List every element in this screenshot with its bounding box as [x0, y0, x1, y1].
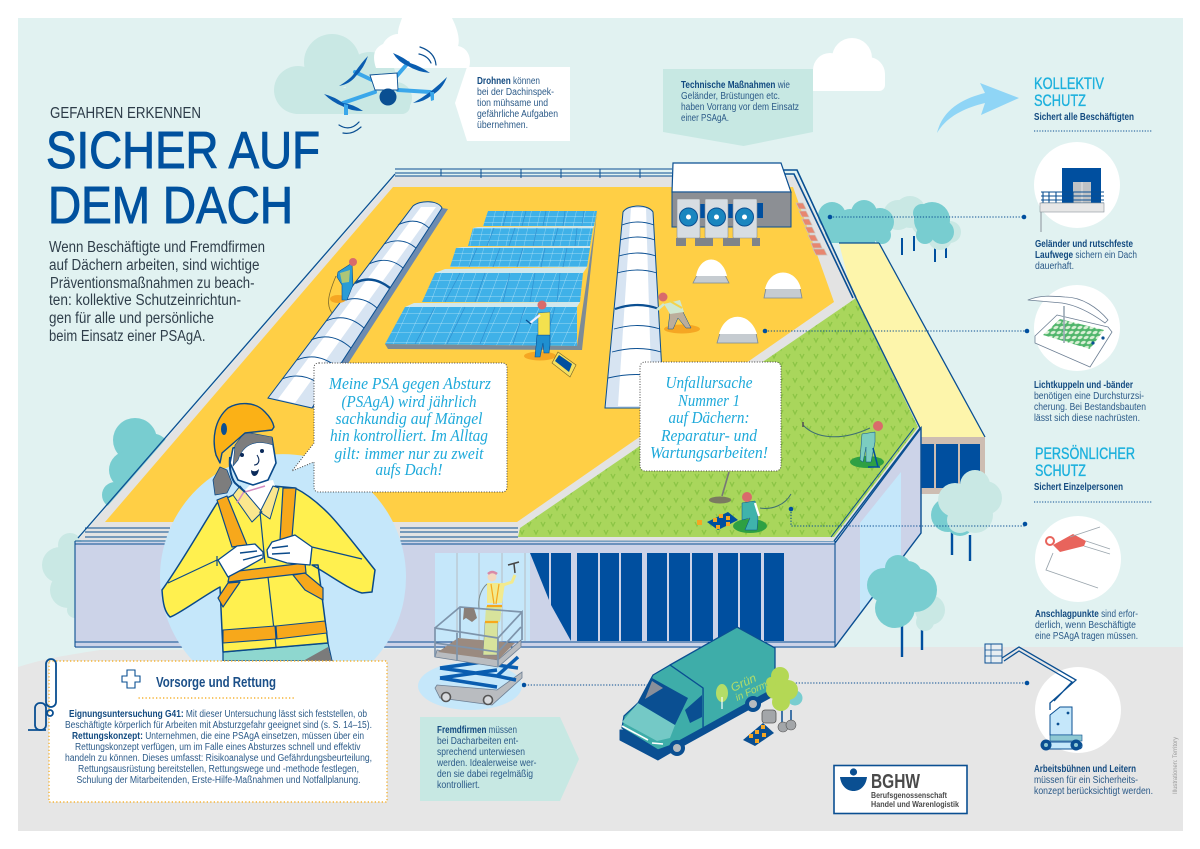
- title block: [46, 105, 320, 235]
- callout: Unfallursache: auf Dächern:: [668, 408, 750, 427]
- dotted connector lines: [522, 215, 1029, 687]
- box body text: Rettungsausrüstung bereitstellen, Rettungswege und -methode festlegen,: [78, 764, 359, 775]
- solar panel array: [385, 211, 597, 350]
- heading: Kollektivschutz: Sichert alle Beschäftigten: [1034, 112, 1134, 123]
- face: [230, 438, 276, 485]
- van: [620, 627, 775, 760]
- intro paragraph: [49, 239, 265, 345]
- caption: railing: dauerhaft.: [1035, 261, 1074, 272]
- lower side building: pale yellow roof: [839, 243, 985, 437]
- walkway pavers: [796, 203, 827, 255]
- light blue circle: [160, 454, 406, 661]
- heading: Persoenlicher Schutz: SCHUTZ: [1035, 461, 1086, 480]
- icon circle: railing: [1034, 142, 1120, 232]
- box body text: Beschäftigte körperlich für Arbeiten mit Absturzgefahr geeignet sind (s. S. 14–15).: [65, 720, 372, 731]
- caption: work platforms: konzept berücksichtigt werden.: [1034, 786, 1153, 797]
- heading: Persoenlicher Schutz: Sichert Einzelpersonen: [1034, 482, 1123, 493]
- box body text: Eignungsuntersuchung G41: Mit dieser Untersuchung lässt sich feststellen, ob: [69, 709, 367, 720]
- box body text: [65, 709, 372, 786]
- intro paragraph: auf Dächern arbeiten, sind wichtige: [49, 257, 260, 274]
- ponytail: [213, 467, 232, 495]
- box: Fremdfirmen: kontrolliert.: [437, 780, 480, 791]
- box: Fremdfirmen: Fremdfirmen müssen: [437, 725, 517, 736]
- harness lanyard: [237, 486, 265, 503]
- helmet: [214, 404, 274, 463]
- cab: [622, 665, 703, 750]
- heading: Persoenlicher Schutz: PERSÖNLICHER: [1035, 444, 1135, 463]
- roof: [78, 169, 920, 541]
- hands: [218, 535, 312, 577]
- van lettering: [728, 668, 769, 704]
- scissor lift with window cleaner: [418, 562, 522, 710]
- worker at solar panels: [524, 300, 556, 360]
- box: Fremdfirmen: den sie dabei regelmäßig: [437, 769, 533, 780]
- box: Fremdfirmen: [420, 717, 579, 801]
- caption: skylight: lässt sich diese nachrüsten.: [1034, 413, 1140, 424]
- logo BGHW: Berufsgenossenschaft: [871, 790, 947, 800]
- box: Vorsorge und Rettung: [49, 661, 387, 802]
- caption: work platforms: müssen für ein Sicherheits-: [1034, 775, 1138, 786]
- box body text: handeln zu können. Dieses umfasst: Risikoanalyse und Gefährdungsbeurteilung,: [65, 753, 372, 764]
- box: Fremdfirmen: sprechend unterwiesen: [437, 747, 525, 758]
- callout: PSA: (PSAgA) wird jährlich: [342, 392, 476, 411]
- yellow roof surface: [105, 187, 834, 522]
- roof slab: [78, 176, 920, 541]
- tree and plants near the van: [743, 667, 802, 746]
- headlight: [622, 726, 663, 744]
- reflective bands: [223, 621, 327, 643]
- jacket: [162, 486, 375, 652]
- box: Fremdfirmen: werden. Idealerweise wer-: [436, 758, 536, 769]
- platform cage: [435, 607, 522, 667]
- box heading: Vorsorge und Rettung: [156, 674, 276, 691]
- callout: PSA: aufs Dach!: [376, 460, 442, 479]
- icon: safety rope and carabiner: [28, 659, 56, 730]
- glass front: [435, 553, 530, 641]
- intro paragraph: Wenn Beschäftigte und Fremdfirmen: [49, 239, 265, 256]
- caption: skylight: [1034, 380, 1146, 424]
- box body text: Schulung der Mitarbeitenden, Erste-Hilfe-Maßnahmen und Notfallplanung.: [76, 775, 360, 786]
- callout: Unfallursache: Reparatur- und: [660, 426, 758, 445]
- callout: Unfallursache: Wartungsarbeiten!: [650, 443, 768, 462]
- green roof surface: [518, 298, 918, 537]
- title block: DEM DACH: [48, 177, 293, 235]
- icon circle: skylight: [1028, 285, 1120, 371]
- caption: skylight: benötigen eine Durchsturzsi-: [1034, 391, 1144, 402]
- hood: [622, 703, 675, 741]
- heading: Kollektivschutz: KOLLEKTIV: [1034, 74, 1104, 93]
- worker at right skylight: [657, 292, 700, 334]
- worker with plants on green roof: [697, 472, 791, 533]
- left long skylight: [268, 202, 448, 410]
- tree front lower: [867, 555, 945, 657]
- neck: [238, 480, 276, 512]
- building front facade: [75, 541, 835, 648]
- roof railings: [78, 169, 920, 541]
- box: Drohnen: Drohnen können: [477, 76, 540, 87]
- building side face: [835, 428, 921, 647]
- heading: Kollektivschutz: [1034, 74, 1152, 131]
- cloud: white right: [808, 38, 885, 91]
- callout: Unfallursache: [640, 362, 781, 471]
- lower navy body: [620, 686, 775, 760]
- box: Technische Massnahmen: [663, 69, 813, 146]
- callout: Unfallursache: Nummer 1: [677, 391, 740, 410]
- tree left mint: [42, 533, 86, 618]
- worker on green roof: [803, 421, 884, 468]
- box: Technische Massnahmen: Geländer, Brüstungen etc.: [681, 91, 780, 102]
- cloud: mint behind drone: [274, 34, 412, 114]
- skylight dome 3: [717, 317, 758, 343]
- caption: anchor point: eine PSAgA tragen müssen.: [1035, 631, 1138, 642]
- tree left teal: [102, 418, 172, 511]
- worker on yellow roof left: [329, 258, 357, 313]
- arrow: [937, 83, 1019, 133]
- box: Drohnen: gefährliche Aufgaben: [477, 109, 558, 120]
- logo BGHW: BGHW: [871, 771, 920, 793]
- caption: skylight: Lichtkuppeln und -bänder: [1034, 380, 1133, 391]
- caption: railing: Geländer und rutschfeste: [1035, 239, 1133, 250]
- icon circle: aerial work platform: [985, 644, 1121, 753]
- caption: railing: [1035, 239, 1137, 272]
- box body text: Rettungskonzept verfügen, um im Falle eines Absturzes schnell und effektiv: [75, 742, 360, 753]
- callout: PSA: [292, 363, 507, 492]
- box body text: Rettungskonzept: Unternehmen, die eine PSAgA einsetzen, müssen über ein: [72, 731, 364, 742]
- right long skylight: [605, 206, 664, 408]
- van lettering: in Form: [734, 679, 769, 704]
- box: Drohnen: tion mühsame und: [477, 98, 548, 109]
- logo BGHW: Handel und Warenlogistik: [871, 799, 959, 809]
- intro paragraph: gen für alle und persönliche: [49, 310, 214, 327]
- callout: PSA: gilt: immer nur zu zweit: [334, 444, 484, 463]
- icon: medical plus: [122, 670, 140, 688]
- box: Drohnen: bei der Dachinspek-: [477, 87, 554, 98]
- lower side building: windows: [921, 437, 985, 494]
- collar: [233, 486, 279, 522]
- title block: SICHER AUF: [46, 122, 320, 180]
- caption: railing: Laufwege sichern ein Dach: [1035, 250, 1137, 261]
- van logo tree: [716, 684, 728, 702]
- harness straps: [217, 488, 323, 607]
- van lettering: Grün: [728, 671, 759, 695]
- cargo box: [670, 627, 775, 728]
- skylight dome 1: [693, 260, 729, 283]
- callout: PSA: sachkundig auf Mängel: [336, 409, 483, 428]
- trees in front right: [931, 470, 1002, 561]
- box: Technische Massnahmen: haben Vorrang vor dem Einsatz: [681, 102, 799, 113]
- windscreen: [638, 678, 688, 725]
- toolbox: [552, 352, 576, 377]
- intro paragraph: beim Einsatz einer PSAgA.: [49, 328, 206, 345]
- cloud: white top: [374, 18, 470, 68]
- trees behind the building, top right: [818, 196, 961, 262]
- icon circle: anchor point: [1035, 516, 1121, 602]
- side window: [685, 695, 702, 723]
- title block: GEFAHREN ERKENNEN: [50, 105, 201, 122]
- caption: anchor point: [1035, 609, 1138, 642]
- illustration credit: Illustrationen: Territory: [1173, 737, 1179, 794]
- logo BGHW: [834, 766, 967, 814]
- caption: skylight: cherung. Bei Bestandsbauten: [1034, 402, 1146, 413]
- intro paragraph: Präventionsmaßnahmen zu beach-: [50, 275, 254, 292]
- callout: PSA: hin kontrolliert. Im Alltag: [330, 426, 488, 445]
- skylight dome 2: [764, 272, 802, 298]
- heading: Persoenlicher Schutz: [1034, 444, 1152, 502]
- ground: [18, 647, 1183, 831]
- front seam: [260, 512, 276, 647]
- intro paragraph: ten: kollektive Schutzeinrichtun-: [49, 292, 241, 309]
- caption: work platforms: Arbeitsbühnen und Leitern: [1034, 764, 1136, 775]
- caption: anchor point: derlich, wenn Beschäftigte: [1035, 620, 1136, 631]
- box: Drohnen: [455, 67, 570, 141]
- window cleaner: [479, 562, 519, 655]
- box: Drohnen: übernehmen.: [477, 120, 528, 131]
- callout: PSA: Meine PSA gegen Absturz: [328, 374, 492, 393]
- woman illustration: [160, 404, 406, 661]
- callout: Unfallursache: Unfallursache: [666, 373, 752, 392]
- caption: anchor point: Anschlagpunkte sind erfor-: [1035, 609, 1138, 620]
- trousers: [223, 643, 332, 661]
- navy windows: [530, 553, 784, 641]
- icon: drone: [324, 47, 447, 133]
- box: Fremdfirmen: bei Dacharbeiten ent-: [437, 736, 518, 747]
- caption: work platforms: [1034, 764, 1153, 797]
- wheels: [669, 740, 685, 756]
- box: Technische Massnahmen: einer PSAgA.: [681, 113, 729, 124]
- arm seams: [168, 547, 362, 583]
- heading: Kollektivschutz: SCHUTZ: [1034, 91, 1086, 110]
- air conditioning unit: [672, 163, 791, 246]
- box: Technische Massnahmen: Technische Maßnahmen wie: [681, 80, 790, 91]
